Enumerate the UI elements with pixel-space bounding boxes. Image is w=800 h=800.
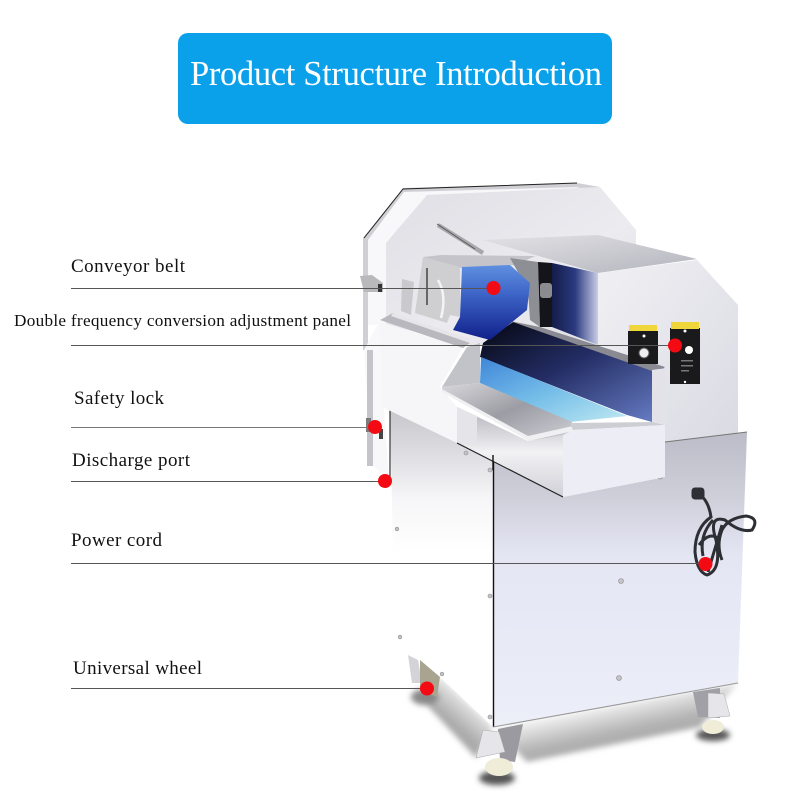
control panel right — [670, 322, 700, 384]
red marker dots — [368, 281, 712, 696]
lower front box — [457, 407, 563, 497]
left hopper — [380, 322, 463, 443]
caster: left — [408, 655, 440, 697]
safety lock — [366, 418, 383, 439]
leader line: adjustment panel — [71, 344, 675, 346]
leader line: safety lock — [71, 426, 372, 428]
label: double frequency conversion adjustment panel: Double frequency conversion adjustment panel — [14, 311, 351, 330]
leader line: power cord — [71, 562, 705, 564]
label: universal wheel: Universal wheel — [73, 658, 202, 679]
roller back wall — [552, 263, 598, 345]
label: safety lock: Safety lock — [74, 388, 164, 409]
right housing face — [598, 260, 738, 442]
casters — [408, 655, 730, 776]
leader line: universal wheel — [71, 688, 425, 690]
label: discharge port: Discharge port — [72, 450, 191, 471]
caster: front — [476, 724, 523, 776]
floor shadow — [411, 677, 738, 785]
power cord — [693, 489, 755, 575]
lower body: left panel — [390, 410, 493, 727]
leader line: discharge port — [71, 480, 385, 482]
title banner — [178, 33, 612, 124]
door latch — [360, 275, 383, 292]
roller frame — [401, 255, 552, 327]
machine illustration — [360, 183, 755, 785]
conveyor dark channel — [480, 322, 665, 422]
caster: rear right — [693, 688, 730, 734]
control panel left — [628, 325, 658, 364]
label: conveyor belt: Conveyor belt — [71, 256, 186, 277]
label: power cord: Power cord — [71, 530, 162, 551]
title banner: Product Structure Introduction — [190, 55, 602, 93]
conveyor belt surface — [480, 357, 627, 422]
back housing — [363, 183, 636, 480]
handle rod — [438, 225, 483, 253]
tray and end wall — [442, 368, 665, 441]
panel screws — [395, 430, 663, 719]
lower body: right panel — [493, 432, 747, 727]
top cover — [483, 235, 697, 273]
blue roller — [453, 265, 530, 340]
leader line: conveyor belt — [71, 288, 490, 290]
